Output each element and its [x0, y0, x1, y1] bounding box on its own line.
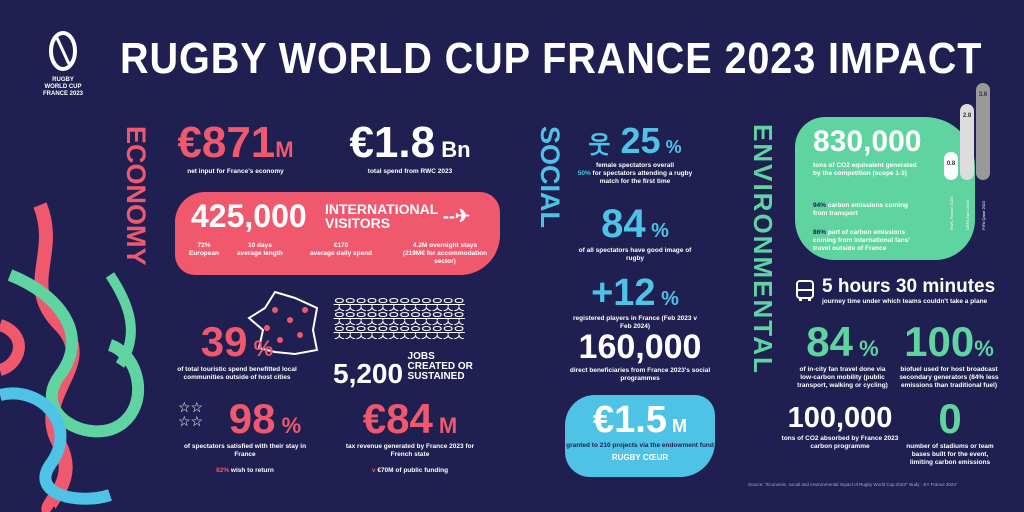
panel: carbon: 830,000 [813, 125, 921, 158]
stat: 25%: female spectators overall [596, 162, 674, 169]
source: Source: "Economic, social and environmental impact of Rugby World Cup 2023" study - EY France 2024" [748, 482, 957, 487]
stat: 0: number of stadiums or team bases built for the event, limiting carbon emissions [906, 443, 994, 466]
panel: carbon: 86% part of carbon emissions coming from international fans' travel outside of France [813, 229, 910, 252]
chart: carbon comparison bars: 2.8 [963, 113, 972, 119]
heading: economy: ECONOMY [121, 126, 151, 266]
panel: international visitors: 425,000 [191, 198, 307, 234]
logo: FRANCE 2023 [43, 91, 83, 97]
stat: 39%: 39 % [201, 318, 273, 365]
stat: 98%: 98 % [229, 395, 301, 442]
panel: 1.5M endowment: granted to 210 projects via the endowment fund [566, 442, 714, 449]
stat: 100000: tons of CO2 absorbed by France 2023 carbon programme [782, 435, 898, 450]
stat: 0 [906, 395, 994, 466]
logo [43, 31, 83, 97]
stat: 84M: v €70M of public funding [372, 467, 448, 474]
stat: 160000: direct beneficiaries from France 2023's social programmes [570, 367, 710, 382]
panel: carbon: tons of CO2 equivalent generated by the competition (scope 1-3) [813, 162, 917, 177]
panel: 1.5M endowment: RUGBY CŒUR [612, 453, 668, 462]
stat: 98% [184, 395, 306, 474]
panel: international visitors: INTERNATIONAL [325, 201, 438, 217]
panel: carbon [795, 117, 975, 260]
panel: international visitors: --✈ [443, 206, 470, 226]
stat: 100% [899, 318, 999, 389]
panel: international visitors: average daily spend [310, 250, 372, 257]
icon: people grid: 웃웃웃웃웃웃웃웃웃웃웃웃 [333, 297, 464, 313]
stat: 5 hours 30: 5 hours 30 minutes [822, 276, 995, 297]
stat: 39%: of total touristic spend benefitted local communities outside of host cities [177, 366, 297, 381]
stat: 25%: 50% for spectators attending a rugby match for the first time [578, 170, 692, 185]
stat: 100000: 100,000 [788, 402, 892, 434]
stat: 84% env [797, 318, 888, 389]
icon: stars: ☆☆ [178, 413, 203, 429]
stat: 0: 0 [938, 395, 962, 442]
stat: +12% [573, 272, 697, 330]
stat: 84% social: 84 % [601, 202, 669, 246]
panel: international visitors: European [189, 250, 219, 257]
stat: 5200 jobs: CREATED OR [408, 361, 473, 372]
chart: carbon comparison bars [944, 83, 990, 230]
stat: 84% env: of in-city fan travel done via low-carbon mobility (public transport, walking or cycling) [797, 366, 888, 389]
stat: 98%: of spectators satisfied with their stay in France [184, 443, 306, 458]
chart: carbon comparison bars: RWC France 2023 [949, 196, 954, 230]
stat: 160000: 160,000 [579, 328, 701, 366]
panel: carbon: 94% carbon emissions coming from transport [813, 202, 908, 217]
stat: 5 hours 30: journey time under which teams couldn't take a plane [822, 298, 987, 305]
icon: stars: ☆☆ [178, 399, 203, 415]
logo: WORLD CUP [44, 84, 82, 90]
stat: 98%: 82% wish to return [216, 467, 274, 474]
stat: 5200 jobs [333, 351, 473, 389]
stat: 160000 [570, 328, 710, 382]
chart: carbon comparison bars: FIFA Qatar 2022 [981, 200, 986, 230]
icon: people grid [333, 297, 465, 341]
icon: bus [796, 280, 814, 301]
icon: france map [247, 290, 318, 355]
title: RUGBY WORLD CUP FRANCE 2023 IMPACT [120, 34, 982, 83]
icon: stars [178, 399, 203, 429]
stat: 100000 [782, 402, 898, 450]
panel: 1.5M endowment [565, 395, 715, 477]
stat: 39% [177, 318, 297, 381]
icon: people grid: 웃웃웃웃웃웃웃웃웃웃웃웃 [333, 311, 464, 327]
panel: international visitors: €170 [334, 242, 348, 249]
heading: social: SOCIAL [535, 126, 565, 228]
panel: international visitors [175, 192, 500, 275]
stat: 25%: 웃 25 % [588, 120, 682, 161]
panel: 1.5M endowment: €1.5 M [593, 399, 687, 441]
stat: 25% [578, 120, 692, 185]
panel: international visitors: (219M€ for accommodation sector) [403, 250, 487, 265]
chart: carbon comparison bars: UEFA Euro 2016 [965, 199, 970, 230]
logo: RUGBY [52, 77, 74, 83]
stat: 5200 jobs: JOBS [408, 351, 435, 362]
stat: 84M [346, 395, 474, 474]
stat: +12%: registered players in France (Feb 2023 v Feb 2024) [573, 315, 697, 330]
panel: international visitors: VISITORS [325, 215, 390, 231]
stat: 1.8Bn: €1.8 Bn [349, 118, 471, 167]
decorative swirl [0, 202, 144, 512]
heading: environmental: ENVIRONMENTAL [748, 124, 778, 375]
chart: carbon comparison bars: 0.8 [947, 161, 956, 167]
stat: 84M: tax revenue generated by France 2023 for French state [346, 443, 474, 458]
stat: 1.8Bn: total spend from RWC 2023 [368, 168, 452, 175]
stat: 871M: net input for France's economy [187, 168, 284, 175]
stat: 100%: biofuel used for host broadcast secondary generators (84% less emissions than traditional fuel) [899, 366, 999, 389]
stat: 84% social [578, 202, 692, 262]
panel: international visitors: 72% [197, 242, 210, 249]
stat: +12%: +12 % [591, 272, 679, 314]
stat: 5200 jobs: SUSTAINED [408, 371, 465, 382]
panel: international visitors: 4.2M overnight stays [413, 242, 477, 249]
stat: 84% social: of all spectators have good image of rugby [579, 247, 691, 262]
stat: 871M: €871M [177, 118, 294, 167]
panel: international visitors: average length [237, 250, 283, 257]
panel: international visitors: 10 days [248, 242, 272, 249]
stat: 5200 jobs: 5,200 [333, 358, 403, 389]
chart: carbon comparison bars: 3.6 [979, 92, 988, 98]
stat: 100%: 100% [904, 318, 994, 365]
stat: 84M: €84 M [363, 395, 457, 442]
icon: people grid: 웃웃웃웃웃웃웃웃웃웃웃웃 [333, 325, 464, 341]
stat: 84% env: 84 % [806, 318, 879, 365]
